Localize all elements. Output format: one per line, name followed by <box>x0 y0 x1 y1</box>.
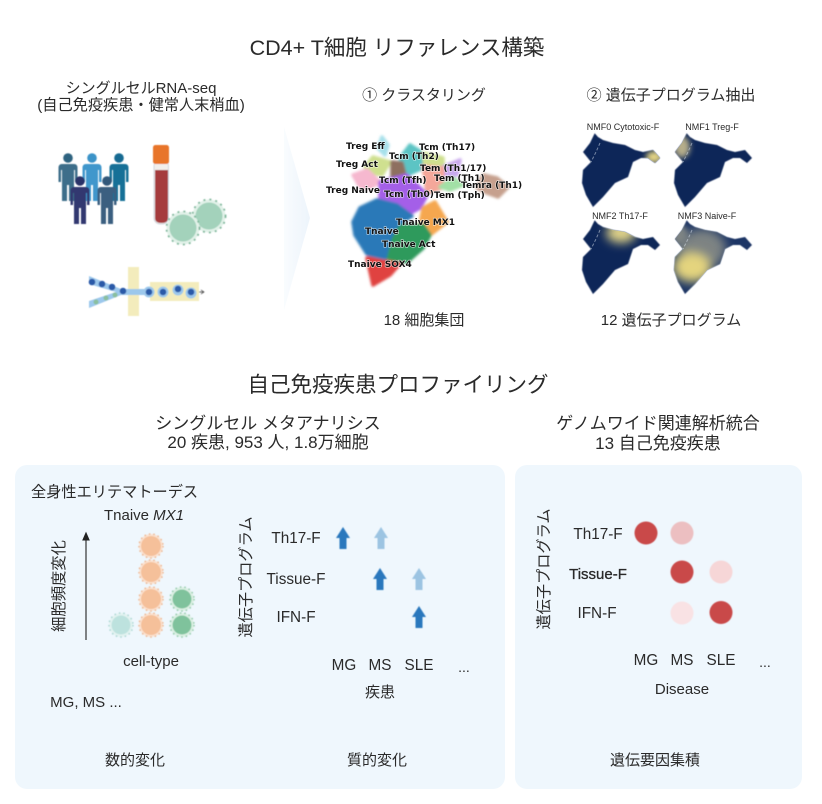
icon: blood tube <box>153 145 169 224</box>
chart: NMF0 map <box>582 122 662 207</box>
heading: single-cell meta-analysis <box>155 414 381 452</box>
chart: UMAP clusters: Tnaive SOX4 <box>348 260 412 270</box>
chart: NMF3 map: NMF3 Naive-F <box>678 211 737 221</box>
chart: UMAP clusters: Tem (Th1/17) <box>420 164 486 174</box>
chart: UMAP clusters: Treg Act <box>336 160 379 170</box>
panel: genetics <box>515 465 802 789</box>
chart: UMAP clusters: Treg Eff <box>346 142 385 152</box>
axis label: gene program: 遺伝子プログラム <box>238 516 255 638</box>
chart: UMAP clusters: Tcm (Th0) <box>384 190 434 200</box>
chart: enrichment dots <box>634 522 732 624</box>
heading: GWAS integration <box>556 414 760 453</box>
chart: UMAP clusters: Treg Naive <box>326 186 380 196</box>
label: Tnaive MX1: Tnaive MX1 <box>104 507 184 524</box>
icon: lymphocytes <box>166 200 226 244</box>
chart: UMAP clusters: Tnaive MX1 <box>396 218 455 228</box>
icon: group of people <box>58 153 128 224</box>
heading: single-cell RNA-seq source: シングルセルRNA-seq <box>66 80 216 97</box>
column labels: diseases: MG <box>332 657 356 674</box>
column labels: diseases (genetics): MS <box>671 652 693 669</box>
chart: NMF0 map: NMF0 Cytotoxic-F <box>587 122 660 132</box>
column labels: diseases (genetics): ... <box>759 654 771 670</box>
axis label: cell-type: cell-type <box>123 653 179 670</box>
column labels: diseases: ... <box>458 659 470 675</box>
chart: UMAP clusters: Tcm (Th17) <box>419 143 475 153</box>
label: MG, MS: MG, MS ... <box>50 694 122 711</box>
row labels: programs (genetics): Tissue-F <box>569 566 627 583</box>
chart: NMF2 map <box>582 211 660 294</box>
chart: UMAP clusters: Temra (Th1) <box>461 181 522 191</box>
row labels: programs (genetics): Th17-F <box>573 526 623 543</box>
axis label: disease: 疾患 <box>365 684 395 701</box>
heading: single-cell meta-analysis: 20 疾患, 953 人, 1.8万細胞 <box>167 433 369 452</box>
chart: UMAP clusters: Tem (Tph) <box>434 191 485 201</box>
column labels: diseases: MS <box>369 657 391 674</box>
chart: NMF3 map <box>672 211 752 294</box>
caption: quantitative change: 数的変化 <box>105 752 165 769</box>
column labels: diseases <box>332 657 470 675</box>
icon: microfluidic droplet device <box>89 267 204 316</box>
chart: UMAP clusters: Tcm (Th2) <box>389 152 439 162</box>
chart: UMAP clusters: Tcm (Tfh) <box>379 176 426 186</box>
chart: effect arrows <box>336 527 426 628</box>
axis label: cell frequency change: 細胞頻度変化 <box>51 540 68 632</box>
arrow: workflow chevron <box>284 127 310 310</box>
chart: UMAP clusters: Tnaive <box>365 227 399 237</box>
heading: single-cell RNA-seq source: (自己免疫疾患・健常人末梢血) <box>37 97 245 114</box>
heading: GWAS integration: ゲノムワイド関連解析統合 <box>556 414 760 433</box>
title: CD4+ T cell reference: CD4+ T細胞 リファレンス構築 <box>250 36 544 60</box>
caption: qualitative change: 質的変化 <box>347 751 407 769</box>
axis label: gene program (genetics): 遺伝子プログラム <box>536 508 553 630</box>
column labels: diseases: SLE <box>405 657 433 674</box>
panel: meta-analysis <box>15 465 505 789</box>
row labels: programs: Tissue-F <box>267 571 325 588</box>
chart: UMAP clusters: Tem (Th1) <box>434 174 485 184</box>
arrow: frequency axis <box>83 533 89 640</box>
chart: UMAP clusters: Tnaive Act <box>382 240 436 250</box>
title: autoimmune disease profiling: 自己免疫疾患プロファイリング <box>247 373 549 397</box>
heading: step 2 gene program extraction: ② 遺伝子プログラム抽出 <box>587 87 755 104</box>
chart: NMF1 map <box>674 122 752 207</box>
chart: NMF1 map: NMF1 Treg-F <box>685 122 739 132</box>
chart: cell counts dot stack <box>109 534 194 637</box>
heading: step 1 clustering: ① クラスタリング <box>362 87 486 104</box>
column labels: diseases (genetics): MG <box>634 652 658 669</box>
heading: GWAS integration: 13 自己免疫疾患 <box>595 434 721 453</box>
row labels: programs <box>267 530 325 626</box>
row labels: programs: Th17-F <box>271 530 321 547</box>
heading: SLE: 全身性エリテマトーデス <box>31 483 198 501</box>
axis label: Disease: Disease <box>655 681 709 698</box>
chart: UMAP clusters <box>326 137 522 285</box>
caption: 18 cell populations: 18 細胞集団 <box>384 312 464 329</box>
caption: genetic enrichment: 遺伝要因集積 <box>610 752 700 769</box>
column labels: diseases (genetics): SLE <box>707 652 735 669</box>
column labels: diseases (genetics) <box>634 652 771 670</box>
caption: 12 gene programs: 12 遺伝子プログラム <box>601 312 741 329</box>
chart: NMF2 map: NMF2 Th17-F <box>592 211 648 221</box>
row labels: programs: IFN-F <box>276 609 316 626</box>
row labels: programs (genetics): IFN-F <box>577 605 617 622</box>
row labels: programs (genetics) <box>569 526 627 622</box>
heading: single-cell meta-analysis: シングルセル メタアナリシス <box>155 414 381 433</box>
heading: single-cell RNA-seq source <box>37 80 245 114</box>
